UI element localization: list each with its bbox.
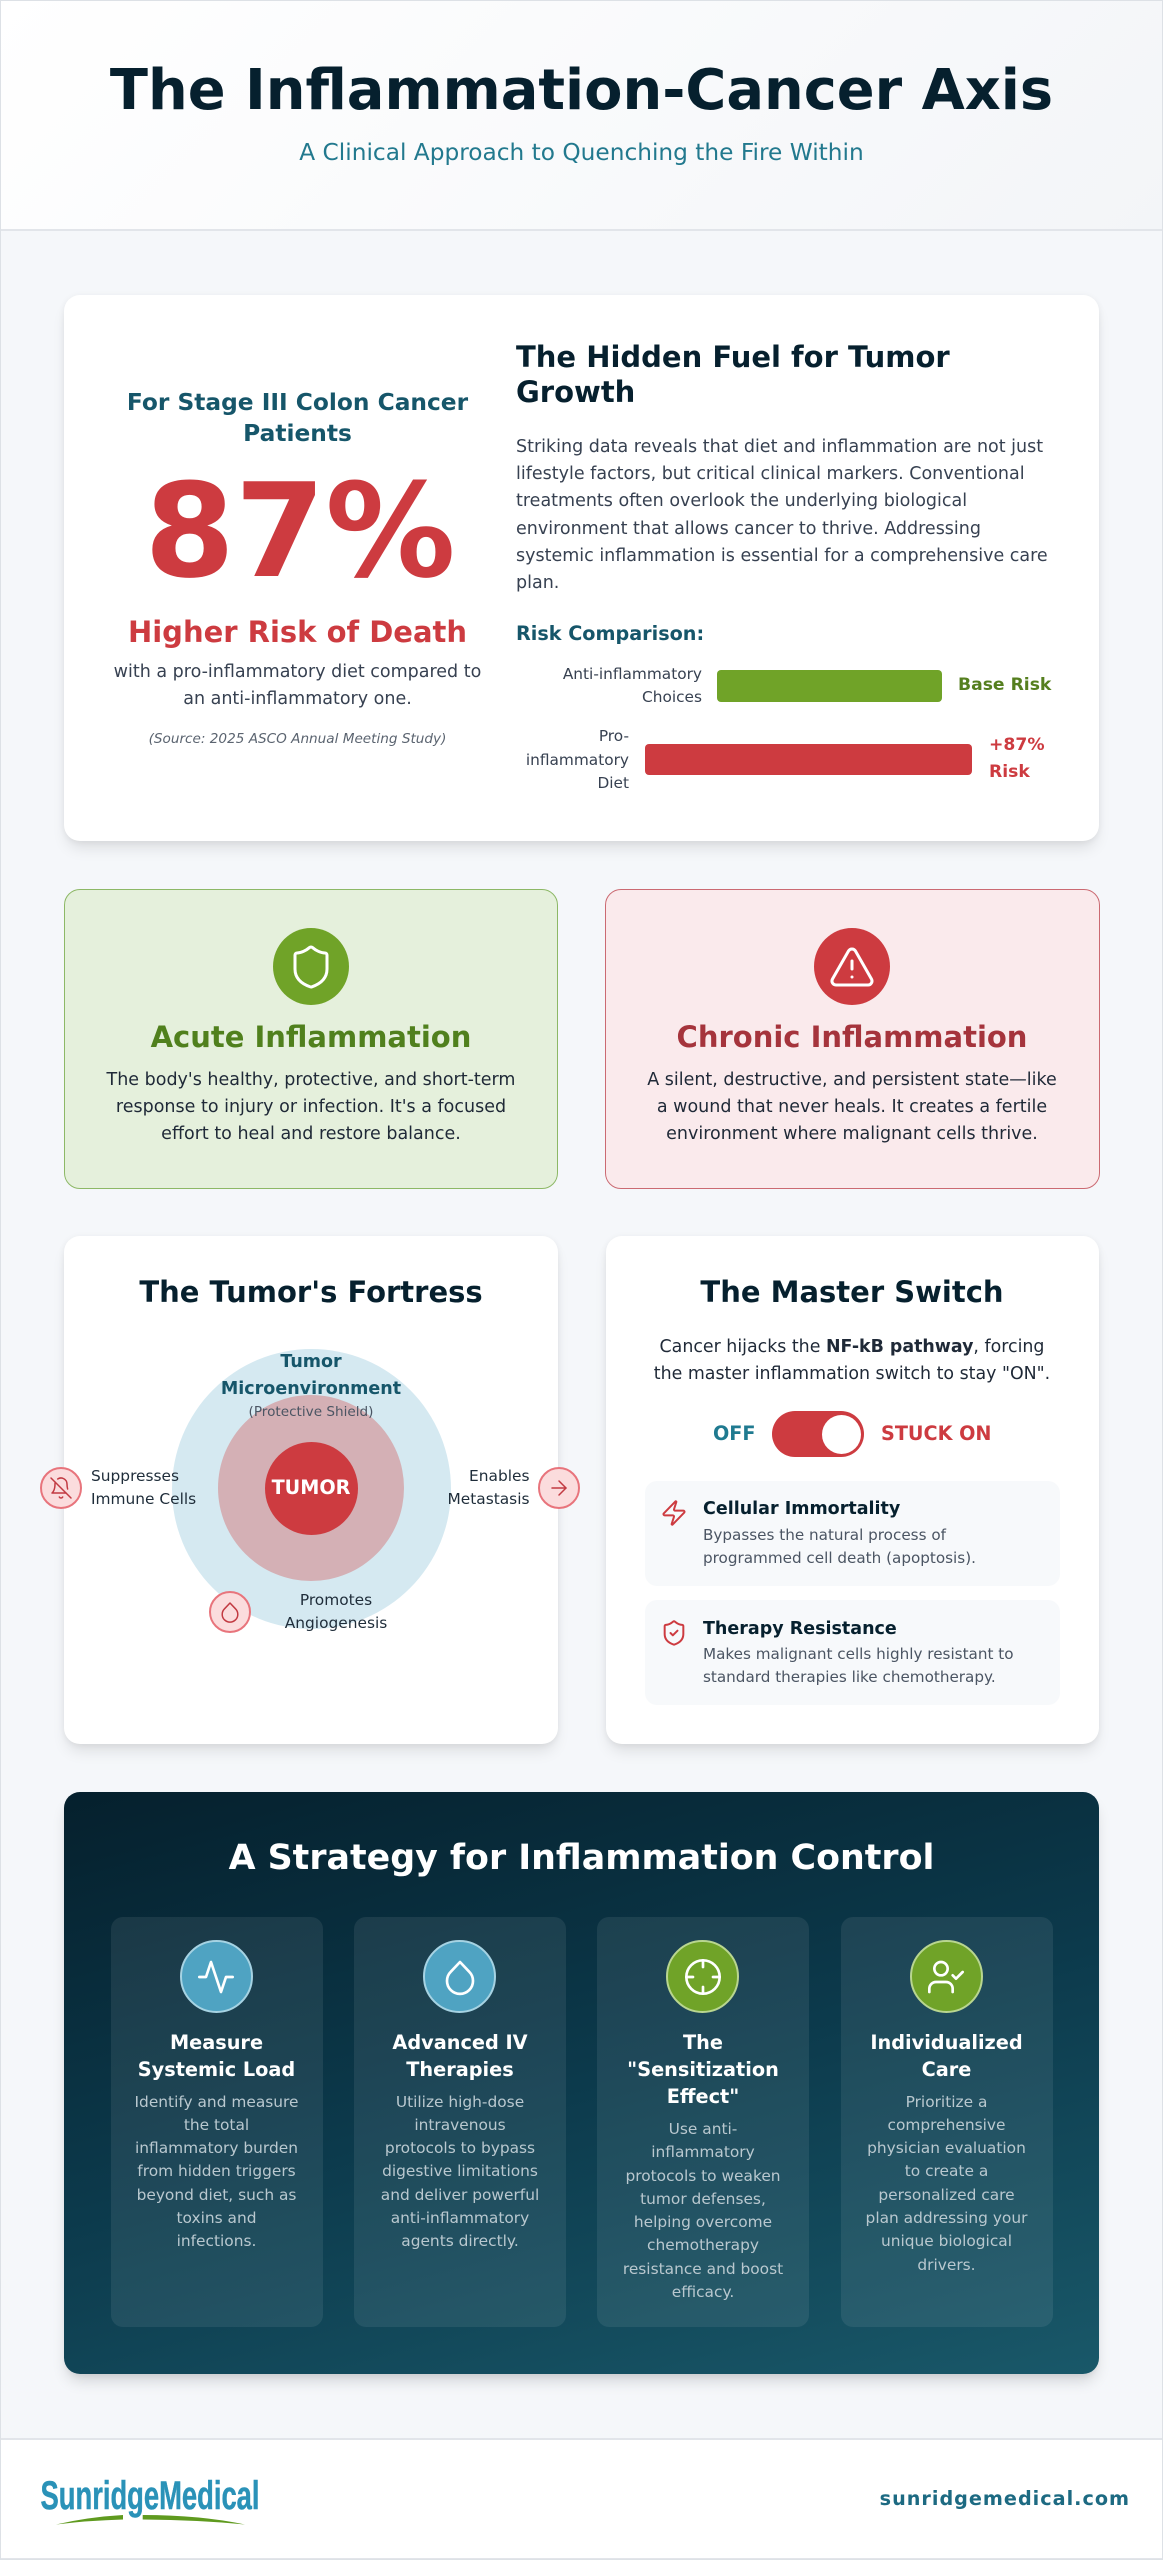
fuel paragraph: Striking data reveals that diet and inflammation are not just (516, 437, 1043, 457)
step title (627, 2031, 779, 2108)
text: chronic: a wound that never heals. It creates a fertile (657, 1097, 1047, 1117)
step text: helping overcome (634, 2213, 772, 2231)
step: measure systemic load (110, 1917, 322, 2327)
middle ring (218, 1395, 404, 1581)
bar: elevated risk (645, 744, 972, 775)
fortress heading: The Tumor's Fortress (139, 1275, 483, 1309)
toggle track (772, 1411, 864, 1457)
bar label: anti-inflammatory: Anti-inflammatory (563, 665, 702, 683)
step text: protocols to bypass (385, 2139, 535, 2157)
stat description: an anti-inflammatory one. (183, 689, 412, 709)
step text: anti-inflammatory (391, 2209, 529, 2227)
bar label: pro-inflammatory: Diet (597, 774, 629, 792)
source note: (Source: 2025 ASCO Annual Meeting Study) (149, 731, 446, 747)
bar value: elevated risk: Risk (989, 762, 1030, 782)
stat description: with a pro-inflammatory diet compared to (114, 662, 481, 682)
icon: droplet (423, 1940, 496, 2013)
fuel paragraph (516, 437, 1048, 593)
label: enables metastasis: Enables (469, 1466, 530, 1484)
icon: warning triangle (814, 928, 890, 1005)
step text: intravenous (414, 2116, 506, 2134)
item title: Cellular Immortality (703, 1499, 900, 1519)
step text: the total (184, 2116, 249, 2134)
label: enables metastasis: Metastasis (447, 1490, 530, 1508)
fuel paragraph: environment that allows cancer to thrive. Addressing (516, 519, 981, 539)
microenvironment label: Microenvironment (221, 1379, 401, 1399)
label: suppresses immune cells: Suppresses (91, 1466, 179, 1484)
icon: shield check (664, 1620, 684, 1646)
text: chronic (647, 1070, 1057, 1144)
heading: chronic: Chronic Inflammation (677, 1020, 1027, 1054)
label: promotes angiogenesis (284, 1590, 387, 1632)
bar label: anti-inflammatory (563, 665, 702, 706)
item: cellular immortality (644, 1481, 1060, 1586)
stat heading: For Stage III Colon Cancer (127, 389, 468, 416)
icon: bell off (40, 1467, 82, 1509)
label: suppresses immune cells: Immune Cells (91, 1490, 196, 1508)
step: individualized care (840, 1917, 1052, 2327)
step title (138, 2031, 295, 2081)
fuel paragraph: systemic inflammation is essential for a comprehensive care (516, 546, 1048, 566)
stat heading: Patients (243, 420, 352, 447)
step title (392, 2031, 528, 2081)
step text: Prioritize a (906, 2092, 987, 2110)
step title: Systemic Load (138, 2058, 295, 2081)
step text: plan addressing your (866, 2209, 1027, 2227)
header (0, 0, 1163, 231)
panel: acute inflammation (64, 889, 558, 1189)
label: enables metastasis (447, 1466, 530, 1508)
icon: activity (180, 1940, 252, 2013)
step text: and deliver powerful (381, 2186, 539, 2204)
label: suppresses immune cells (91, 1466, 196, 1508)
switch text: the master inflammation switch to stay "ON". (654, 1364, 1050, 1384)
step text: to create a (905, 2162, 988, 2180)
step text: Identify and measure (135, 2092, 298, 2110)
fuel text block (516, 340, 1048, 593)
panel: strategy (64, 1792, 1099, 2374)
step text: Use anti- (669, 2120, 737, 2138)
strategy heading: A Strategy for Inflammation Control (229, 1838, 934, 1878)
bar label: anti-inflammatory: Choices (642, 688, 702, 706)
fuel paragraph: lifestyle factors, but critical clinical markers. Conventional (516, 464, 1025, 484)
big number: 87% (144, 455, 456, 607)
item text: Bypasses the natural process of (703, 1526, 946, 1544)
icon: droplet (208, 1591, 250, 1633)
shield sublabel: (Protective Shield) (249, 1404, 373, 1420)
step title (870, 2031, 1023, 2081)
switch text (654, 1336, 1050, 1384)
icon: zap (662, 1500, 686, 1526)
step text: from hidden triggers (137, 2162, 296, 2180)
text: acute: response to injury or infection. It's a focused (116, 1097, 506, 1117)
step text: physician evaluation (867, 2139, 1026, 2157)
panel: chronic inflammation (605, 889, 1100, 1189)
step: sensitization effect (597, 1917, 809, 2327)
step title: Individualized (870, 2031, 1023, 2054)
step title: Measure (170, 2031, 263, 2054)
bar: base risk (717, 670, 942, 702)
fuel paragraph: treatments often overlook the underlying biological (516, 491, 967, 511)
label: promotes angiogenesis: Angiogenesis (285, 1614, 387, 1632)
website url: sunridgemedical.com (880, 2487, 1130, 2510)
step text: agents directly. (401, 2232, 519, 2250)
stat heading (127, 389, 468, 447)
text: acute: effort to heal and restore balance. (161, 1124, 461, 1144)
diagram: tumor microenvironment (40, 1349, 580, 1633)
text: acute: The body's healthy, protective, and short-term (107, 1070, 515, 1090)
off label: OFF (713, 1422, 756, 1445)
step text: comprehensive (888, 2116, 1005, 2134)
step text: personalized care (878, 2186, 1015, 2204)
bar label: pro-inflammatory: inflammatory (526, 750, 629, 768)
toggle knob (822, 1414, 861, 1454)
step text: tumor defenses, (640, 2190, 766, 2208)
stat description (114, 662, 481, 709)
step text: Utilize high-dose (396, 2092, 524, 2110)
bar value: base risk: Base Risk (958, 675, 1051, 695)
text: acute (106, 1070, 515, 1144)
step title: "Sensitization (627, 2058, 779, 2081)
item text (703, 1645, 1014, 1686)
panel: master switch (606, 1236, 1099, 1744)
step text: inflammatory (651, 2143, 755, 2161)
stat label: Higher Risk of Death (128, 615, 467, 649)
step text: efficacy. (672, 2283, 734, 2301)
item text: Makes malignant cells highly resistant to (703, 1645, 1014, 1663)
footer (0, 2438, 1163, 2560)
step: advanced iv therapies (354, 1917, 566, 2327)
step text: infections. (177, 2232, 256, 2250)
icon: arrow right (538, 1467, 580, 1509)
step text: unique biological (881, 2232, 1012, 2250)
switch heading: The Master Switch (700, 1275, 1004, 1309)
inner circle: tumor (264, 1442, 358, 1535)
step text: beyond diet, such as (137, 2186, 296, 2204)
step title: Care (922, 2058, 971, 2081)
step title: Effect" (667, 2085, 739, 2108)
step text: inflammatory burden (135, 2139, 298, 2157)
bar value: elevated risk (989, 735, 1045, 782)
text: chronic: environment where malignant cells thrive. (666, 1124, 1038, 1144)
label: promotes angiogenesis: Promotes (300, 1590, 372, 1608)
step text (866, 2092, 1028, 2274)
step text (381, 2092, 539, 2250)
panel: tumor fortress (64, 1236, 558, 1744)
outer ring: microenvironment (172, 1348, 451, 1628)
item text (703, 1526, 976, 1566)
bar chart: risk comparison (526, 665, 1052, 792)
fuel heading: Growth (516, 375, 635, 409)
text: chronic: A silent, destructive, and persistent state—like (647, 1070, 1057, 1090)
item text: programmed cell death (apoptosis). (703, 1548, 976, 1566)
step title: Therapies (406, 2058, 514, 2081)
step text: chemotherapy (647, 2236, 759, 2254)
heading: acute: Acute Inflammation (151, 1020, 471, 1054)
risk comparison heading: Risk Comparison: (516, 622, 704, 645)
step text: drivers. (917, 2256, 976, 2274)
item text: standard therapies like chemotherapy. (703, 1668, 996, 1686)
subtitle: A Clinical Approach to Quenching the Fire Within (299, 139, 864, 166)
stuck on label: STUCK ON (881, 1422, 992, 1445)
icon: shield (273, 928, 349, 1005)
tumor label: TUMOR (272, 1476, 350, 1499)
step text: resistance and boost (623, 2260, 783, 2278)
toggle switch (713, 1411, 992, 1457)
step text: toxins and (176, 2209, 256, 2227)
icon: crosshair (666, 1940, 739, 2013)
microenvironment label (221, 1352, 401, 1399)
fuel heading: The Hidden Fuel for Tumor (516, 340, 950, 374)
item: therapy resistance (644, 1600, 1060, 1705)
stat block (114, 389, 481, 747)
step text (623, 2120, 783, 2301)
switch text: Cancer hijacks the NF-kB pathway, forcing (660, 1336, 1044, 1356)
title: The Inflammation-Cancer Axis (110, 58, 1053, 123)
bar label: pro-inflammatory (526, 727, 629, 792)
step text (135, 2092, 298, 2250)
step text: protocols to weaken (625, 2167, 781, 2185)
bar value: elevated risk: +87% (989, 735, 1045, 755)
fuel heading (516, 340, 950, 409)
icon: user check (910, 1940, 982, 2013)
step title: Advanced IV (392, 2031, 528, 2054)
panel: hidden fuel (64, 295, 1099, 841)
fuel paragraph: plan. (516, 573, 559, 593)
bar label: pro-inflammatory: Pro- (599, 727, 629, 745)
item title: Therapy Resistance (703, 1618, 897, 1638)
step title: The (683, 2031, 723, 2054)
microenvironment label: Tumor (280, 1352, 342, 1372)
step text: digestive limitations (382, 2162, 538, 2180)
